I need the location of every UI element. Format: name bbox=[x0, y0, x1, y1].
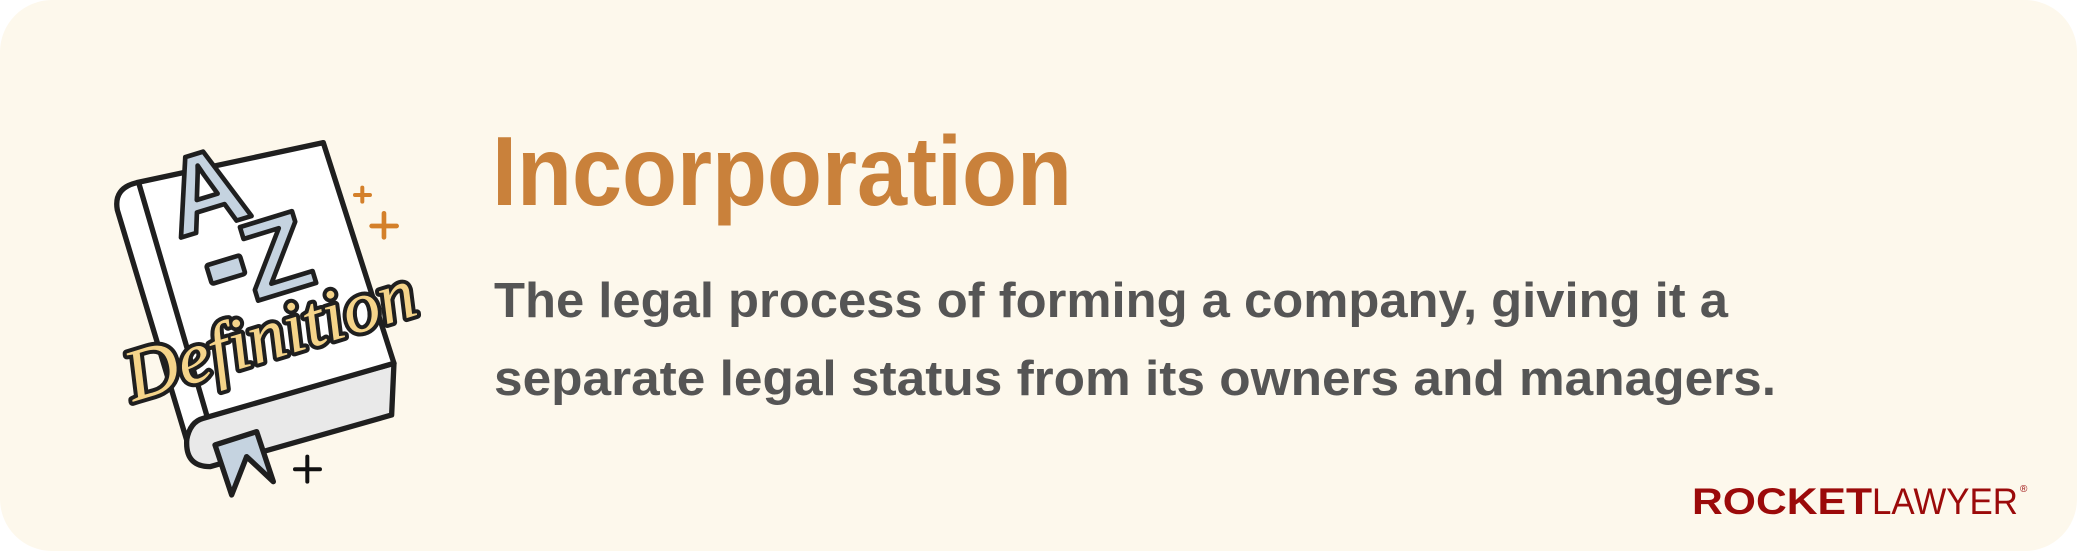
cover bbox=[117, 143, 394, 440]
letters A - Z: A bbox=[149, 120, 261, 261]
logo: Rocket Lawyer bbox=[1692, 481, 2028, 522]
logo: Rocket Lawyer: ROCKET bbox=[1692, 481, 1872, 522]
Definition script: Definition bbox=[113, 252, 425, 417]
logo: Rocket Lawyer: LAWYER bbox=[1872, 481, 2018, 522]
icon: definition book bbox=[113, 120, 425, 495]
text block: definition bbox=[494, 274, 1776, 406]
page block bbox=[187, 363, 394, 467]
bookmark bbox=[215, 432, 273, 495]
text block: definition: separate legal status from its owners and managers. bbox=[494, 352, 1776, 406]
letters A - Z: Z bbox=[226, 187, 326, 325]
text block: definition: The legal process of forming a company, giving it a bbox=[494, 274, 1729, 328]
letters A - Z bbox=[149, 120, 326, 325]
logo: Rocket Lawyer: ® bbox=[2020, 484, 2028, 495]
title: Incorporation bbox=[492, 116, 1072, 226]
sparkles bbox=[355, 188, 370, 202]
spine line bbox=[139, 185, 207, 415]
